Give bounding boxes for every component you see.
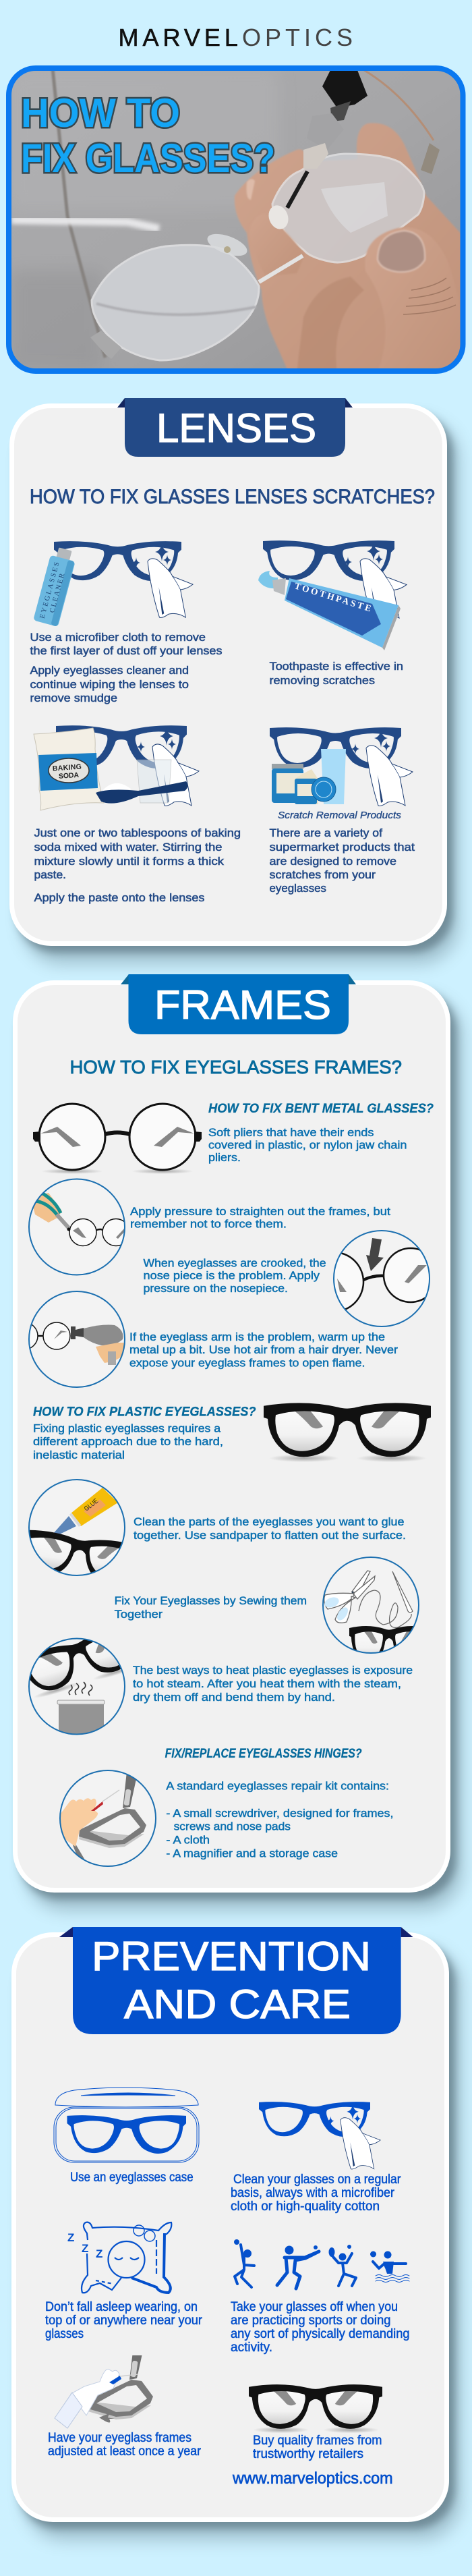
illustration: baking soda: BAKING bbox=[52, 763, 82, 773]
text: soft pliers: Soft pliers that have their ends bbox=[208, 1126, 374, 1139]
figure: tennis bbox=[329, 2245, 356, 2286]
text: apply pressure: remember not to force them. bbox=[130, 1218, 287, 1231]
text: crooked nose piece: pressure on the nosepiece. bbox=[143, 1282, 288, 1295]
text: plastic approach bbox=[33, 1422, 223, 1461]
illustration: cleaner spray and cloth bbox=[33, 541, 193, 627]
text: supermarket products: are designed to remove bbox=[270, 855, 396, 868]
text: warm up arm bbox=[129, 1331, 398, 1370]
heading: eyeglasses frames: HOW TO FIX EYEGLASSES FRAMES? bbox=[70, 1057, 402, 1077]
text: adjust yearly: Have your eyeglass frames bbox=[48, 2431, 191, 2445]
icon: cleaning glasses bbox=[259, 2102, 380, 2169]
icon: adjusting frames bbox=[54, 2355, 153, 2429]
text: plastic approach: different approach due to the hard, bbox=[33, 1435, 223, 1448]
ribbon: lenses bbox=[117, 398, 353, 457]
icon: pliers on round glasses bbox=[29, 1179, 129, 1275]
ribbon: frames: FRAMES bbox=[154, 982, 331, 1028]
text: supermarket products: There are a variety of bbox=[270, 827, 382, 839]
illustration: quality black frames bbox=[249, 2384, 382, 2433]
text: soft pliers: covered in plastic, or nylon jaw chain bbox=[208, 1139, 407, 1151]
illustration: round metal glasses bbox=[33, 1104, 202, 1174]
text: clean regularly: Clean your glasses on a regular bbox=[233, 2173, 401, 2187]
text: don't fall asleep bbox=[45, 2300, 203, 2341]
text: baking soda bbox=[34, 827, 241, 904]
text: microfiber cloth: continue wiping the lenses to bbox=[30, 678, 189, 691]
icon: sports figures bbox=[234, 2239, 409, 2289]
text: don't fall asleep: glasses bbox=[45, 2327, 84, 2341]
text: toothpaste: removing scratches bbox=[270, 674, 375, 687]
ribbon: prevention and care: PREVENTION bbox=[92, 1934, 371, 1979]
icon: glue tube: GLUE bbox=[83, 1497, 100, 1513]
illustration: scratch removal products bbox=[270, 727, 413, 806]
caption: scratch removal products: Scratch Removal Products bbox=[278, 810, 401, 821]
text: supermarket products bbox=[270, 827, 415, 895]
panel: frames bbox=[11, 974, 463, 1911]
illustration: baking soda: SODA bbox=[59, 771, 80, 781]
text: clean regularly: basis, always with a microfiber bbox=[231, 2186, 395, 2200]
icon: hair dryer on glasses bbox=[28, 1291, 125, 1388]
text: sewing: Fix Your Eyeglasses by Sewing them bbox=[115, 1594, 307, 1607]
illustration: toothpaste bbox=[258, 540, 407, 650]
text: apply pressure: Apply pressure to straighten out the frames, but bbox=[130, 1205, 390, 1218]
text: crooked nose piece: nose piece is the problem. Apply bbox=[143, 1269, 320, 1282]
text: supermarket products: scratches from your bbox=[270, 868, 376, 881]
text: microfiber cloth: the first layer of dust off your lenses bbox=[30, 644, 223, 657]
heading: lens scratches: HOW TO FIX GLASSES LENSES SCRATCHES? bbox=[30, 486, 435, 508]
hero title bbox=[21, 90, 275, 181]
text: clean and glue bbox=[134, 1515, 406, 1542]
text: clean and glue: Clean the parts of the eyeglasses you want to glue bbox=[134, 1515, 405, 1528]
hero title: FIX GLASSES? bbox=[21, 136, 275, 181]
text: microfiber cloth bbox=[30, 631, 223, 704]
text: microfiber cloth: Use a microfiber cloth to remove bbox=[30, 631, 206, 644]
text: clean and glue: together. Use sandpaper to flatten out the surface. bbox=[134, 1529, 406, 1542]
ribbon: frames bbox=[121, 974, 356, 1034]
text: clean regularly bbox=[231, 2173, 401, 2214]
figure: water polo bbox=[370, 2251, 409, 2282]
text: repair kit list: - A cloth bbox=[166, 1834, 210, 1847]
heading: bent metal glasses: HOW TO FIX BENT METAL GLASSES? bbox=[208, 1102, 434, 1116]
icon: steaming pot and glasses bbox=[28, 1638, 125, 1735]
text: sewing bbox=[115, 1594, 307, 1621]
logo: Marvel Optics: MARVELOPTICS bbox=[119, 24, 353, 51]
hero title: HOW TO bbox=[21, 90, 180, 136]
text: crooked nose piece: When eyeglasses are crooked, the bbox=[143, 1256, 326, 1269]
icon: hand repairing hinge bbox=[59, 1770, 156, 1866]
text: toothpaste bbox=[270, 660, 403, 687]
text: supermarket products: eyeglasses bbox=[270, 882, 326, 895]
text: plastic approach: inelastic material bbox=[33, 1449, 125, 1461]
icon: glue tube bbox=[28, 1479, 125, 1576]
text: baking soda: Apply the paste onto the lenses bbox=[34, 891, 205, 904]
hero photo panel bbox=[9, 68, 463, 372]
text: sports: Take your glasses off when you bbox=[231, 2300, 398, 2314]
text: sports: activity. bbox=[231, 2341, 272, 2355]
text: don't fall asleep: Don’t fall asleep wearing, on bbox=[45, 2300, 198, 2314]
icon: sleeping with glasses: Z bbox=[82, 2242, 88, 2255]
figure: basketball bbox=[234, 2239, 254, 2287]
text: repair kit list bbox=[166, 1780, 394, 1859]
text: hot steam: to hot steam. After you heat them with the steam, bbox=[133, 1677, 401, 1690]
text: baking soda: paste. bbox=[34, 868, 66, 881]
text: supermarket products: supermarket products that bbox=[270, 841, 415, 853]
text: repair kit list: - A small screwdriver, designed for frames, bbox=[166, 1807, 394, 1820]
icon: scissors, thread and needle bbox=[322, 1557, 419, 1654]
text: baking soda: soda mixed with water. Stirring the bbox=[34, 841, 223, 853]
text: buy quality: Buy quality frames from bbox=[253, 2434, 382, 2448]
text: hot steam: dry them off and bend them by hand. bbox=[133, 1691, 335, 1704]
text: adjust yearly bbox=[48, 2431, 202, 2459]
heading: plastic eyeglasses: HOW TO FIX PLASTIC EYEGLASSES? bbox=[33, 1405, 256, 1420]
icon: sleeping with glasses: Z bbox=[96, 2247, 102, 2260]
text: hot steam bbox=[133, 1664, 413, 1704]
text: repair kit list: screws and nose pads bbox=[174, 1820, 291, 1833]
text: warm up arm: If the eyeglass arm is the problem, warm up the bbox=[129, 1331, 385, 1343]
text: sports: are practicing sports or doing bbox=[231, 2314, 391, 2328]
text: clean regularly: cloth or high-quality cotton bbox=[231, 2200, 380, 2214]
illustration: cleaner spray and cloth: EYEGLASSES bbox=[38, 561, 61, 619]
text: sewing: Together bbox=[115, 1608, 163, 1621]
ribbon: lenses: LENSES bbox=[156, 405, 316, 451]
text: baking soda: Just one or two tablespoons of baking bbox=[34, 827, 241, 839]
website url: www.marveloptics.com bbox=[232, 2469, 393, 2488]
icon: sleeping with glasses bbox=[67, 2222, 171, 2293]
panel: prevention and care bbox=[13, 1927, 462, 2541]
text: warm up arm: expose your eyeglass frames to open flame. bbox=[129, 1356, 365, 1370]
text: buy quality: trustworthy retailers bbox=[253, 2447, 363, 2461]
caption: case: Use an eyeglasses case bbox=[70, 2171, 194, 2185]
ribbon: prevention and care: AND CARE bbox=[124, 1982, 351, 2027]
ribbon: prevention and care bbox=[59, 1927, 413, 2034]
text: crooked nose piece bbox=[143, 1256, 326, 1295]
text: hot steam: The best ways to heat plastic eyeglasses is exposure bbox=[133, 1664, 413, 1677]
text: apply pressure bbox=[130, 1205, 390, 1231]
illustration: toothpaste: TOOTHPASTE bbox=[293, 581, 372, 613]
text: plastic approach: Fixing plastic eyeglasses requires a bbox=[33, 1422, 221, 1435]
panel: lenses bbox=[12, 398, 460, 965]
illustration: baking soda bbox=[34, 725, 199, 810]
text: sports: any sort of physically demanding bbox=[231, 2327, 410, 2341]
text: soft pliers: pliers. bbox=[208, 1151, 241, 1164]
icon: arrow on nose bridge bbox=[333, 1230, 430, 1327]
text: sports bbox=[231, 2300, 410, 2355]
text: repair kit list: - A magnifier and a storage case bbox=[166, 1847, 338, 1859]
text: repair kit list: A standard eyeglasses repair kit contains: bbox=[166, 1780, 389, 1792]
text: don't fall asleep: top of or anywhere near your bbox=[45, 2314, 203, 2328]
text: toothpaste: Toothpaste is effective in bbox=[270, 660, 403, 673]
icon: eyeglasses case bbox=[54, 2088, 199, 2162]
illustration: cleaner spray and cloth: CLEANER bbox=[49, 573, 66, 614]
text: adjust yearly: adjusted at least once a year bbox=[48, 2444, 202, 2459]
figure: volleyball bbox=[277, 2245, 319, 2289]
text: microfiber cloth: remove smudge bbox=[30, 692, 117, 704]
text: baking soda: mixture slowly until it forms a thick bbox=[34, 855, 225, 868]
text: warm up arm: metal up a bit. Use hot air from a hair dryer. Never bbox=[129, 1343, 398, 1356]
illustration: black plastic glasses bbox=[264, 1403, 431, 1462]
text: soft pliers bbox=[208, 1126, 407, 1164]
text: buy quality bbox=[253, 2434, 382, 2461]
heading: hinges: FIX/REPLACE EYEGLASSES HINGES? bbox=[165, 1747, 362, 1761]
text: microfiber cloth: Apply eyeglasses cleaner and bbox=[30, 664, 189, 677]
icon: sleeping with glasses: Z bbox=[67, 2231, 74, 2244]
